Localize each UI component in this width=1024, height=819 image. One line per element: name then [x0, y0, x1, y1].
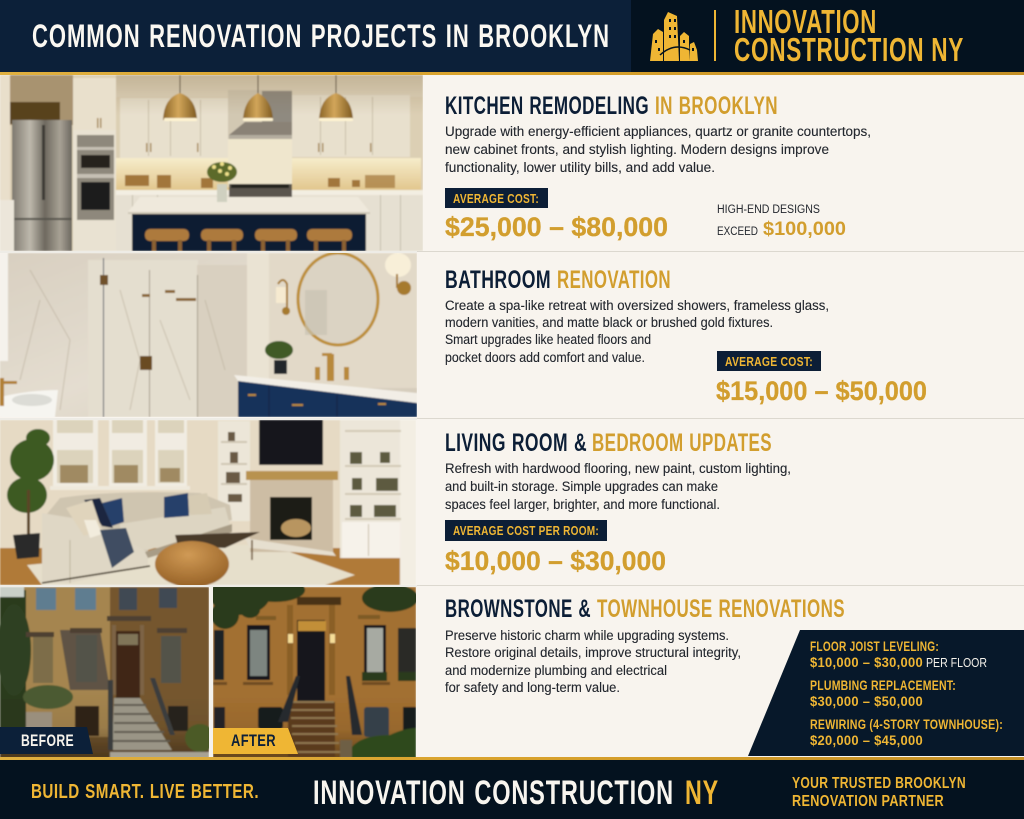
heading: brownstone	[445, 595, 845, 623]
body text: living room: and built-in storage. Simple upgrades can make	[445, 479, 718, 494]
heading: living room	[445, 429, 772, 457]
heading: kitchen: KITCHEN REMODELING	[445, 92, 649, 120]
body text: bathroom: modern vanities, and matte black or brushed gold fixtures.	[445, 315, 773, 330]
cost breakdown panel	[748, 630, 1024, 756]
heading: bathroom: RENOVATION	[557, 266, 671, 294]
body text: living room: Refresh with hardwood flooring, new paint, custom lighting,	[445, 461, 791, 476]
heading: bathroom: BATHROOM	[445, 266, 551, 294]
section dividers	[0, 251, 1024, 587]
photo: living room	[0, 420, 416, 587]
logo divider line	[714, 10, 716, 61]
body text: kitchen: new cabinet fronts, and stylish lighting. Modern designs improve	[445, 142, 829, 157]
body text: brownstone: Preserve historic charm while upgrading systems.	[445, 628, 729, 643]
label: after	[213, 728, 298, 754]
title: COMMON RENOVATION PROJECTS IN BROOKLYN	[32, 18, 610, 54]
body text: kitchen: functionality, lower utility bills, and add value.	[445, 160, 715, 175]
logo wordmark: INNOVATION	[734, 3, 877, 40]
header banner	[0, 0, 1024, 75]
cost badge: living room	[445, 520, 607, 541]
cost item: plumbing replacement: PLUMBING REPLACEMENT:	[810, 678, 956, 693]
logo wordmark	[734, 3, 964, 68]
label: before	[0, 727, 93, 754]
footer company name: NY	[685, 774, 719, 812]
body text: bathroom: Smart upgrades like heated floors and	[445, 332, 651, 347]
cost badge: living room: AVERAGE COST PER ROOM:	[453, 524, 599, 538]
footer tagline: BUILD SMART. LIVE BETTER.	[31, 781, 259, 803]
body text: kitchen	[445, 124, 871, 175]
body text: kitchen: Upgrade with energy-efficient appliances, quartz or granite countertops,	[445, 124, 871, 139]
footer partner line: RENOVATION PARTNER	[792, 793, 944, 810]
heading: living room: LIVING ROOM &	[445, 429, 587, 457]
footer partner line	[792, 775, 966, 810]
body text: living room	[445, 461, 791, 512]
photo: bathroom	[0, 253, 417, 417]
body text: living room: spaces feel larger, brighter, and more functional.	[445, 497, 720, 512]
cost item: plumbing replacement: $30,000 – $50,000	[810, 694, 923, 709]
photo: brownstone after	[210, 575, 418, 758]
body text: bathroom: pocket doors add comfort and value.	[445, 350, 645, 365]
footer partner line: YOUR TRUSTED BROOKLYN	[792, 775, 966, 792]
callout: high-end designs: HIGH-END DESIGNS	[717, 204, 820, 216]
body text: brownstone: for safety and long-term value.	[445, 680, 620, 695]
icon: company logo buildings	[650, 12, 698, 61]
heading: bathroom	[445, 266, 671, 294]
photo: kitchen	[0, 75, 423, 251]
label: before: BEFORE	[21, 731, 74, 750]
body text: brownstone	[445, 628, 741, 695]
cost item: floor joist leveling: $10,000 – $30,000	[810, 655, 923, 670]
body text: bathroom	[445, 298, 829, 365]
cost item: rewiring	[810, 717, 1003, 748]
cost item: floor joist leveling: FLOOR JOIST LEVELING:	[810, 639, 939, 654]
cost item: floor joist leveling: PER FLOOR	[926, 655, 987, 670]
footer company name: INNOVATION CONSTRUCTION	[313, 774, 674, 812]
heading: living room: BEDROOM UPDATES	[592, 429, 772, 457]
price: living room: $10,000 – $30,000	[445, 546, 666, 576]
photo: brownstone before	[0, 587, 215, 758]
body text: brownstone: and modernize plumbing and electrical	[445, 663, 667, 678]
price: kitchen: $25,000 – $80,000	[445, 212, 668, 242]
body text: brownstone: Restore original details, improve structural integrity,	[445, 645, 741, 660]
body text: bathroom: Create a spa-like retreat with oversized showers, frameless glass,	[445, 298, 829, 313]
callout: high-end designs	[717, 204, 846, 240]
divider between photos	[209, 587, 213, 758]
panel: living room and bedroom updates	[445, 429, 791, 576]
callout: high-end designs: $100,000	[763, 218, 846, 240]
panel: kitchen remodeling	[445, 92, 871, 242]
heading: brownstone: BROWNSTONE &	[445, 595, 591, 623]
heading: kitchen: IN BROOKLYN	[655, 92, 778, 120]
panel: bathroom renovation	[445, 266, 927, 406]
cost badge: kitchen	[445, 188, 548, 208]
heading: brownstone: TOWNHOUSE RENOVATIONS	[597, 595, 845, 623]
cost item: rewiring: $20,000 – $45,000	[810, 733, 923, 748]
footer banner	[0, 757, 1024, 819]
callout: high-end designs: EXCEED	[717, 226, 758, 238]
cost item: floor joist leveling	[810, 639, 987, 670]
cost badge: kitchen: AVERAGE COST:	[453, 192, 539, 206]
cost badge: bathroom	[717, 351, 821, 371]
cost item: plumbing replacement	[810, 678, 956, 709]
cost badge: bathroom: AVERAGE COST:	[725, 355, 813, 369]
label: after: AFTER	[231, 731, 276, 750]
price: bathroom: $15,000 – $50,000	[716, 376, 927, 406]
panel: brownstone and townhouse renovations	[445, 595, 1024, 756]
